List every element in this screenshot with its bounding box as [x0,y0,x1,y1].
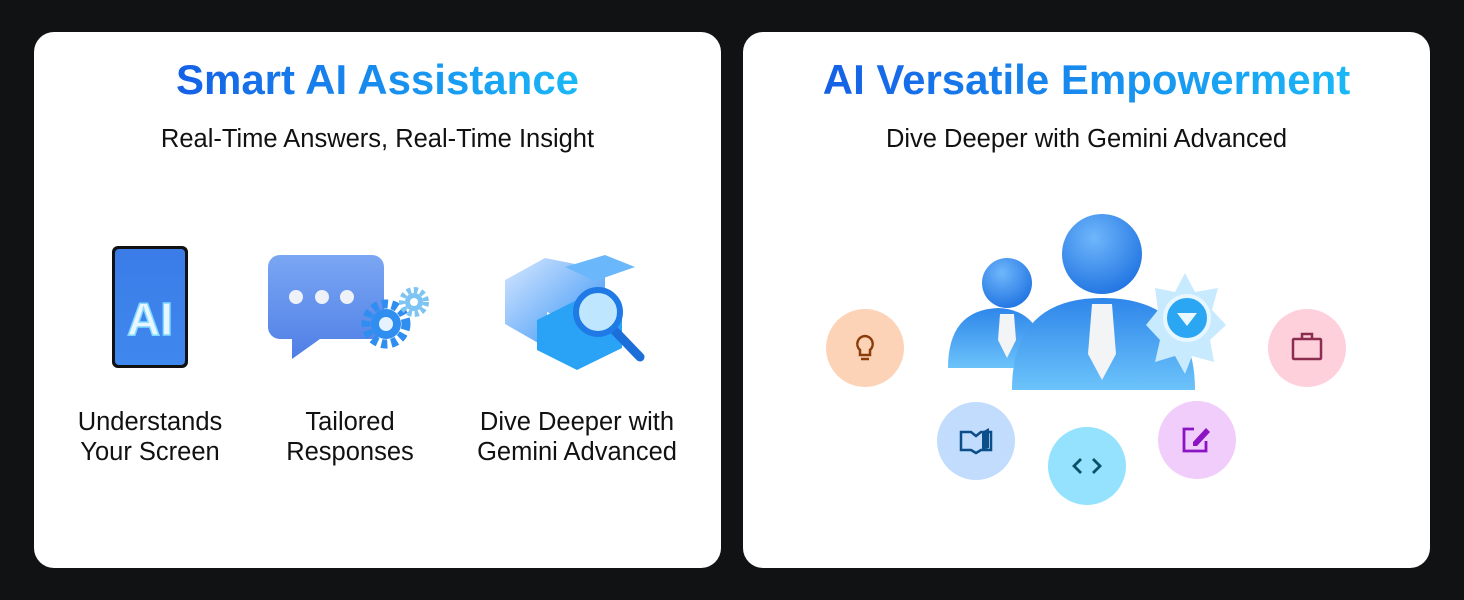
panel: AI versatile empowerment [743,32,1430,568]
label: tailored responses: Tailored [305,408,395,436]
label: tailored responses: Responses [286,438,414,466]
title: Smart AI Assistance [176,56,579,103]
label: dive deeper: Gemini Advanced [477,438,677,466]
icon: code circle [1048,427,1126,505]
label: dive deeper: Dive Deeper with [480,408,674,436]
illustration: users with badge [948,214,1226,390]
label: dive deeper [477,408,677,466]
illustration [826,214,1346,505]
title: AI Versatile Empowerment [823,56,1350,103]
label: understands your screen [78,408,222,466]
panel: smart AI assistance [34,32,721,568]
icon: phone AI: AI [127,293,173,345]
icon: briefcase circle [1268,309,1346,387]
label: understands your screen: Your Screen [80,438,220,466]
icon: book circle [937,402,1015,480]
icon: phone AI [112,246,188,368]
subtitle: Real-Time Answers, Real-Time Insight [161,125,594,153]
icon: chat bubble with gears [268,255,426,359]
label: understands your screen: Understands [78,408,222,436]
icon: edit circle [1158,401,1236,479]
subtitle: Dive Deeper with Gemini Advanced [886,125,1287,153]
icon: lightbulb circle [826,309,904,387]
label: tailored responses [286,408,414,466]
icon: cube with magnifier [505,255,640,370]
icons [112,246,644,370]
